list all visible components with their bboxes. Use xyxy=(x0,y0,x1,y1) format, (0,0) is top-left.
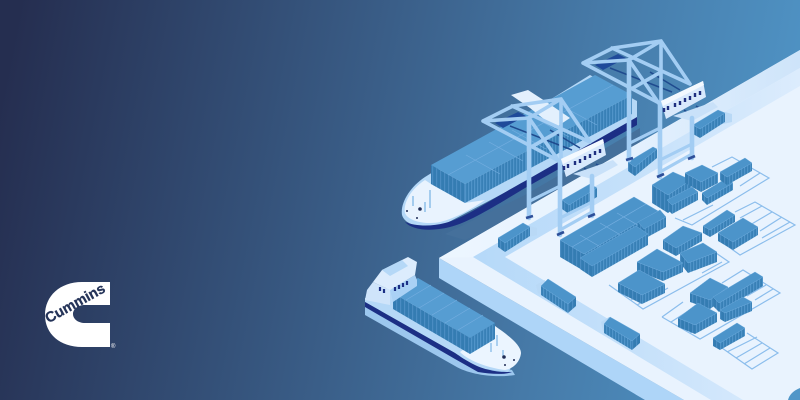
container stack: lower right yard xyxy=(678,272,763,350)
small container ship xyxy=(365,257,521,376)
container stack: centre yard xyxy=(618,226,717,304)
gantry crane rear xyxy=(583,41,718,177)
ship containers xyxy=(431,75,632,203)
logo: Cummins xyxy=(43,281,116,350)
truck 5 xyxy=(628,147,657,176)
truck 6 xyxy=(562,184,597,214)
container stack: main yard xyxy=(560,197,666,277)
logo: Cummins: Cummins xyxy=(43,281,108,327)
gantry crane front xyxy=(483,99,618,235)
quay platform xyxy=(439,50,800,400)
truck 1 xyxy=(498,223,537,252)
trucks xyxy=(498,110,732,350)
logo: Cummins: ® xyxy=(111,343,116,350)
parking grids xyxy=(609,157,795,369)
container stack: upper right yard xyxy=(652,158,758,250)
small ship containers xyxy=(393,278,495,354)
large container ship xyxy=(402,75,640,240)
truck 3 xyxy=(601,317,640,350)
truck 4 xyxy=(693,110,732,138)
small ship bridge xyxy=(365,257,417,305)
truck 2 xyxy=(536,279,576,313)
